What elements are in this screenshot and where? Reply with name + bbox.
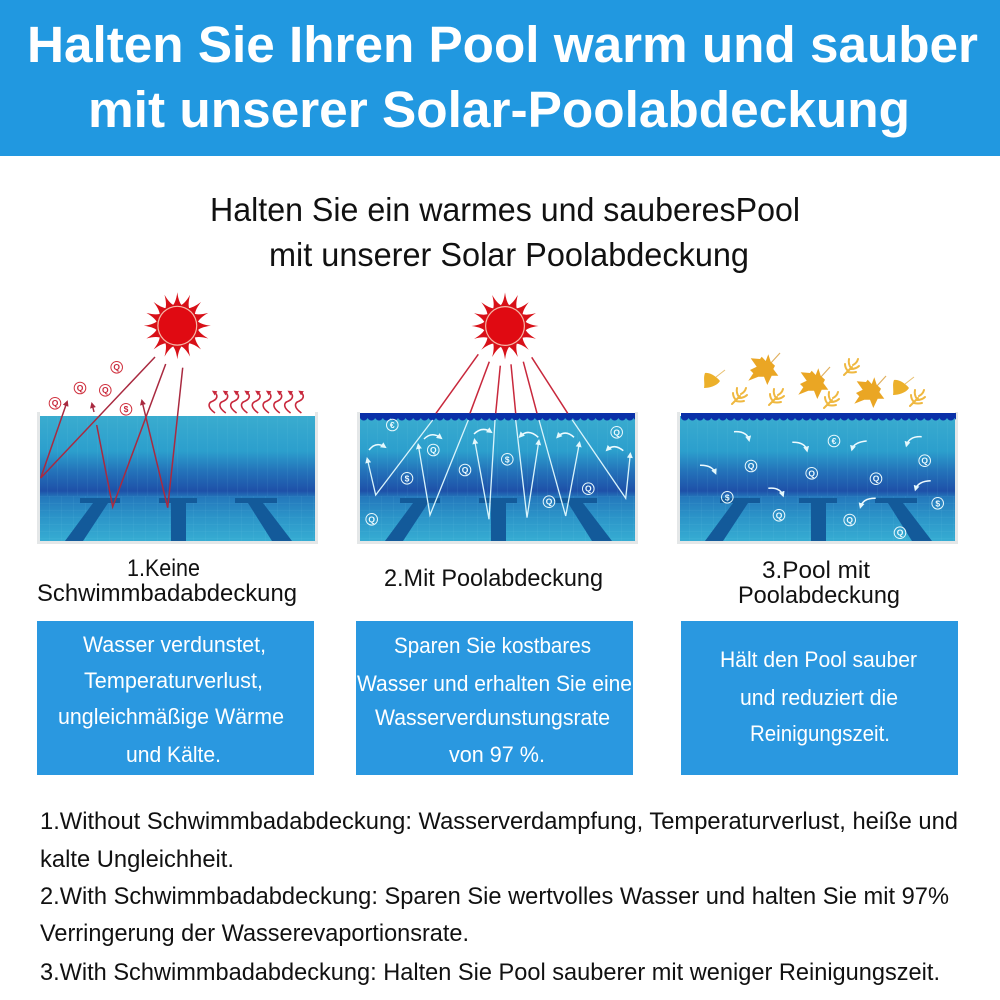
subtitle: Halten Sie ein warmes und sauberesPool: [210, 191, 800, 228]
title line 2: mit unserer Solar-Poolabdeckung: [88, 81, 910, 138]
header band: [0, 0, 1000, 156]
info box 3: Hält den Pool sauber: [720, 647, 917, 672]
retained heat coins: €: [390, 420, 395, 430]
retained heat coins: Q: [462, 465, 469, 475]
coins in water: Q: [748, 461, 755, 471]
info box 2: von 97 %.: [449, 742, 545, 767]
incoming rays: [436, 354, 568, 413]
info box 2: Wasserverdunstungsrate: [375, 705, 610, 730]
solar cover: [681, 413, 956, 421]
coins in water: Q: [808, 468, 815, 478]
info box 3: [681, 621, 958, 775]
panel: pool with cover: [357, 292, 638, 544]
retained heat coins: Q: [430, 445, 437, 455]
curved arrows in water: [700, 432, 931, 507]
info box 2: [356, 621, 633, 775]
retained heat coins: Q: [546, 497, 553, 507]
curved heat arrows: [369, 429, 623, 451]
pool basin: [37, 412, 318, 544]
panel: pool with cover and leaves: [677, 353, 958, 544]
title line 1: Halten Sie Ihren Pool warm und sauber: [27, 16, 978, 73]
lost heat coins: Q: [113, 362, 120, 372]
summary text block: [40, 808, 958, 986]
info box 1: Wasser verdunstet,: [83, 632, 266, 657]
column heading 1: 1.Keine: [127, 555, 200, 582]
info box 1: ungleichmäßige Wärme: [58, 704, 284, 729]
column heading 1: [37, 555, 297, 607]
retained heat coins: Q: [613, 427, 620, 437]
icon: autumn leaves: [704, 353, 925, 408]
retained heat coins: [366, 419, 622, 525]
pool basin: [677, 412, 958, 544]
retained heat coins: $: [505, 454, 510, 464]
info box 2: Wasser und erhalten Sie eine: [357, 671, 632, 696]
icon: sun: [472, 292, 538, 360]
reflected rays in water: [367, 420, 630, 519]
reflected rays: [41, 357, 183, 508]
lost heat coins: Q: [102, 385, 109, 395]
coins in water: Q: [776, 510, 783, 520]
info box 2: Sparen Sie kostbares: [394, 633, 591, 658]
icon: sun: [144, 292, 211, 359]
pool basin: [357, 412, 638, 544]
coins in water: Q: [873, 474, 880, 484]
summary text block: 1.Without Schwimmbadabdeckung: Wasserverdampfung, Temperaturverlust, heiße und: [40, 808, 958, 835]
column heading 1: Schwimmbadabdeckung: [37, 580, 297, 607]
coins in water: $: [725, 492, 730, 502]
summary text block: 2.With Schwimmbadabdeckung: Sparen Sie wertvolles Wasser und halten Sie mit 97%: [40, 883, 949, 910]
info box 1: [37, 621, 314, 775]
lost heat coins: Q: [77, 383, 84, 393]
coins in water: [722, 435, 944, 538]
panel: pool without cover: [37, 292, 318, 544]
coins in water: €: [832, 436, 837, 446]
summary text block: 3.With Schwimmbadabdeckung: Halten Sie Pool sauberer mit weniger Reinigungszeit.: [40, 959, 940, 986]
info box 3: Reinigungszeit.: [750, 721, 890, 746]
retained heat coins: Q: [585, 484, 592, 494]
info box 3: und reduziert die: [740, 685, 898, 710]
coins in water: Q: [897, 528, 904, 538]
coins in water: Q: [921, 456, 928, 466]
lost heat coins: $: [124, 404, 129, 414]
info box 1: Temperaturverlust,: [84, 668, 263, 693]
info box 1: und Kälte.: [126, 742, 221, 767]
column heading 3: [738, 557, 900, 609]
retained heat coins: Q: [368, 514, 375, 524]
subtitle: mit unserer Solar Poolabdeckung: [269, 236, 749, 273]
column heading 3: 3.Pool mit: [762, 557, 870, 584]
summary text block: Verringerung der Wasserevaportionsrate.: [40, 920, 469, 947]
evaporation squiggles: [209, 392, 303, 413]
summary text block: kalte Ungleichheit.: [40, 846, 234, 873]
solar cover: [360, 413, 635, 421]
subtitle: [210, 191, 800, 273]
lost heat coins: Q: [52, 398, 59, 408]
coins in water: Q: [846, 515, 853, 525]
retained heat coins: $: [405, 473, 410, 483]
coins in water: $: [935, 498, 940, 508]
lost heat coins: [49, 362, 132, 415]
column heading 2: 2.Mit Poolabdeckung: [384, 565, 603, 592]
column heading 3: Poolabdeckung: [738, 582, 900, 609]
